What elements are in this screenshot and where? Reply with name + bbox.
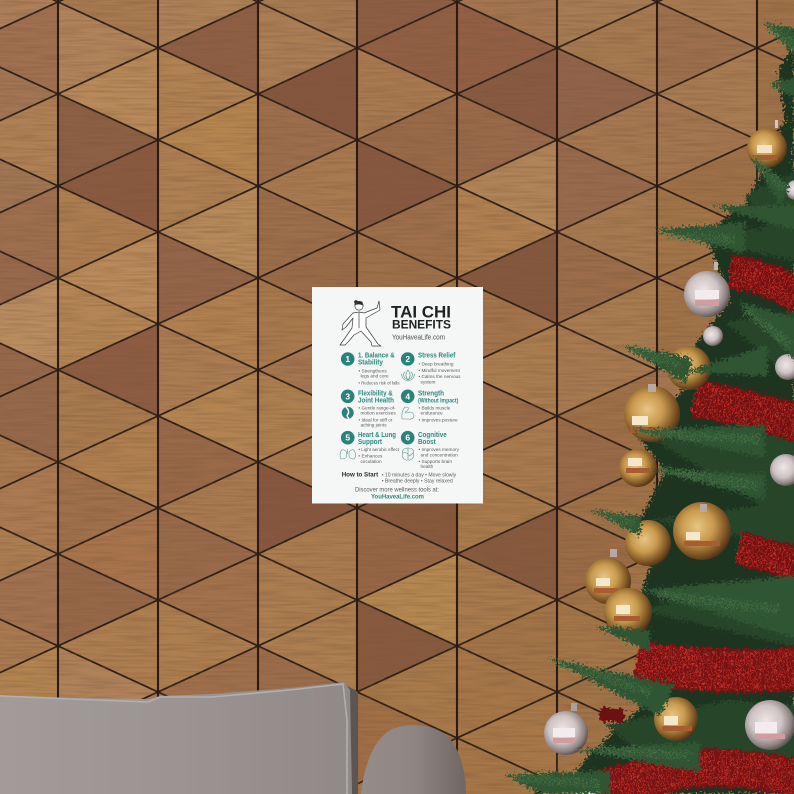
item 1: balance and stability: • Reduces risk of falls	[358, 380, 400, 385]
footer: Discover more wellness tools at:	[355, 488, 439, 494]
item 3: flexibility and joint health: • Ideal for stiff or	[358, 417, 393, 422]
title: TAI CHI	[391, 304, 451, 322]
dark inner branches	[605, 170, 794, 760]
title	[391, 304, 451, 342]
item 3: flexibility and joint health	[341, 388, 396, 428]
how to start: • 10 minutes a day • Move slowly	[382, 472, 456, 478]
item 6: cognitive boost: • Supports brain	[418, 459, 452, 464]
item 6: cognitive boost: Boost	[418, 437, 436, 446]
item 3: flexibility and joint health: aching joints	[360, 423, 387, 428]
item 5: heart and lung support: 5	[345, 433, 350, 443]
christmas tree	[505, 22, 794, 794]
item 2: stress relief: 2	[405, 354, 410, 364]
item 4: strength: (Without Impact)	[418, 397, 458, 404]
item 2: stress relief: system	[420, 379, 435, 384]
item 5: heart and lung support: Support	[358, 437, 383, 446]
baubles	[544, 120, 794, 794]
tinsel garlands	[600, 272, 794, 790]
item 2: stress relief: • Calms the nervous	[418, 374, 461, 379]
icon: lungs	[340, 449, 356, 459]
item 2: stress relief: • Deep breathing	[418, 362, 454, 367]
sofa back shadow	[344, 684, 358, 794]
title: BENEFITS	[392, 320, 451, 332]
grey cushion	[0, 682, 352, 794]
cushion piping	[0, 684, 347, 794]
icon: brain	[402, 448, 414, 460]
item 6: cognitive boost: and concentration	[420, 452, 458, 457]
sofa arm	[361, 725, 466, 794]
how to start: • Breathe deeply • Stay relaxed	[382, 478, 453, 484]
tree body	[560, 45, 794, 794]
item 5: heart and lung support: circulation	[360, 459, 382, 464]
item 2: stress relief: Stress Relief	[418, 351, 456, 360]
poster sheet	[312, 287, 483, 504]
item 3: flexibility and joint health: 3	[345, 391, 350, 401]
item 5: heart and lung support: • Enhances	[358, 454, 383, 459]
item 5: heart and lung support: • Light aerobic effect	[358, 447, 400, 452]
item 1: balance and stability: 1. Balance &	[358, 351, 395, 360]
item 4: strength: endurance	[420, 411, 443, 416]
item 6: cognitive boost	[401, 430, 460, 469]
item 1: balance and stability: legs and core	[360, 374, 389, 378]
item 4: strength: • Builds muscle	[418, 405, 451, 410]
item 2: stress relief: • Mindful movement	[418, 368, 460, 373]
sofa	[0, 682, 466, 794]
poster: Tai Chi Benefits	[312, 287, 483, 504]
item 1: balance and stability: 1	[345, 354, 350, 364]
item 6: cognitive boost: health	[420, 464, 434, 469]
item 2: stress relief	[401, 351, 461, 384]
item 4: strength: • Improves posture	[418, 417, 458, 422]
icon: joint	[342, 407, 354, 419]
icon: flexed arm	[402, 407, 414, 419]
item 1: balance and stability	[341, 351, 400, 385]
item 3: flexibility and joint health: Joint Health	[358, 395, 394, 404]
item 6: cognitive boost: Cognitive	[418, 430, 447, 439]
item 5: heart and lung support	[340, 430, 400, 464]
item 1: balance and stability: • Strengthens	[358, 368, 387, 373]
item 6: cognitive boost: 6	[405, 433, 410, 443]
item 4: strength	[401, 388, 458, 422]
item 3: flexibility and joint health: Flexibility &	[358, 388, 393, 397]
footer	[355, 488, 439, 500]
item 4: strength: Strength	[418, 388, 444, 397]
item 5: heart and lung support: Heart & Lung	[358, 430, 396, 439]
item 1: balance and stability: Stability	[358, 358, 383, 367]
tai chi figure	[340, 300, 381, 346]
item 3: flexibility and joint health: • Gentle range-of-	[358, 405, 396, 410]
fir branches	[505, 22, 794, 794]
footer: YouHaveaLife.com	[371, 493, 424, 500]
how to start	[342, 471, 456, 484]
icon: lotus	[402, 370, 414, 381]
item 4: strength: 4	[405, 391, 410, 401]
title: YouHaveaLife.com	[392, 332, 445, 342]
item 6: cognitive boost: • Improves memory	[418, 447, 460, 452]
item 3: flexibility and joint health: motion exercises	[360, 411, 396, 416]
how to start: How to Start	[342, 471, 379, 478]
